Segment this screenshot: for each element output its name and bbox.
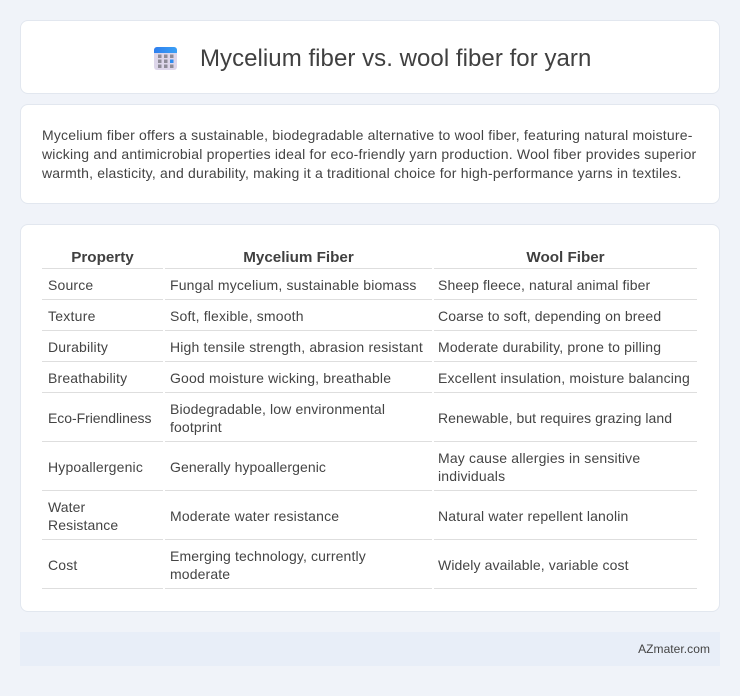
row: source — [48, 277, 650, 293]
row: water resistance: Natural water repellent lanolin — [438, 508, 628, 524]
row: cost: moderate — [170, 566, 230, 582]
summary text: wicking and antimicrobial properties ideal for eco-friendly yarn production. Wool fiber provides superior — [42, 146, 696, 162]
row: hypoallergenic — [48, 450, 640, 484]
row: texture: Soft, flexible, smooth — [170, 308, 304, 324]
row: eco-friendliness — [48, 401, 672, 435]
row: hypoallergenic: Hypoallergenic — [48, 459, 143, 475]
row: cost — [48, 548, 629, 582]
row: water resistance: Water — [48, 499, 85, 515]
row: texture: Texture — [48, 308, 96, 324]
row: eco-friendliness: Biodegradable, low environmental — [170, 401, 385, 417]
table card — [20, 224, 720, 612]
row: durability: High tensile strength, abrasion resistant — [170, 339, 423, 355]
summary text: warmth, elasticity, and durability, making it a traditional choice for high-performance yarns in textiles. — [42, 165, 682, 181]
column headers: Mycelium Fiber — [243, 249, 354, 266]
comparison table — [42, 249, 697, 589]
row: hypoallergenic: individuals — [438, 468, 505, 484]
row: durability: Moderate durability, prone to pilling — [438, 339, 661, 355]
title card — [20, 20, 720, 94]
column headers: Wool Fiber — [526, 249, 605, 266]
row: water resistance: Resistance — [48, 517, 118, 533]
row: durability: Durability — [48, 339, 108, 355]
row: source: Fungal mycelium, sustainable biomass — [170, 277, 417, 293]
row: cost: Cost — [48, 557, 77, 573]
footer bar — [20, 632, 720, 666]
column headers — [71, 249, 605, 266]
summary card — [20, 104, 720, 204]
row: cost: Emerging technology, currently — [170, 548, 366, 564]
row: eco-friendliness: Eco-Friendliness — [48, 410, 151, 426]
row: texture: Coarse to soft, depending on breed — [438, 308, 661, 324]
icon: calendar — [154, 47, 177, 70]
row: water resistance: Moderate water resistance — [170, 508, 339, 524]
row: texture — [48, 308, 661, 324]
row: hypoallergenic: Generally hypoallergenic — [170, 459, 326, 475]
row: hypoallergenic: May cause allergies in sensitive — [438, 450, 640, 466]
row: breathability: Excellent insulation, moisture balancing — [438, 370, 690, 386]
column headers: Property — [71, 249, 134, 266]
footer credit: AZmater.com — [638, 642, 710, 656]
row: source: Sheep fleece, natural animal fiber — [438, 277, 650, 293]
row: water resistance — [48, 499, 628, 533]
row: durability — [48, 339, 661, 355]
row: source: Source — [48, 277, 93, 293]
row: eco-friendliness: footprint — [170, 419, 222, 435]
row: breathability: Breathability — [48, 370, 127, 386]
summary text: Mycelium fiber offers a sustainable, biodegradable alternative to wool fiber, featuring natural moisture- — [42, 127, 693, 143]
summary text — [42, 127, 696, 181]
title: Mycelium fiber vs. wool fiber for yarn — [200, 45, 591, 72]
row: cost: Widely available, variable cost — [438, 557, 629, 573]
row: eco-friendliness: Renewable, but requires grazing land — [438, 410, 672, 426]
row: breathability: Good moisture wicking, breathable — [170, 370, 391, 386]
row: breathability — [48, 370, 690, 386]
